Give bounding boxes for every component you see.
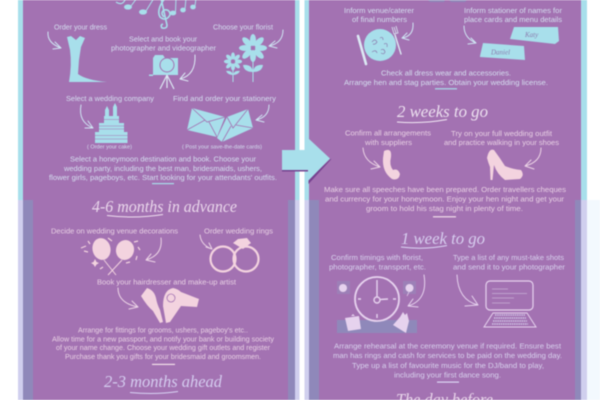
arrow: to balloons — [146, 238, 161, 262]
text: select and book your photographer and videographer: Select and book your — [129, 34, 197, 44]
icon: laptop with shot list — [484, 281, 536, 327]
text: fittings and passport paragraph — [52, 326, 274, 361]
heading: 1 week to go: 1 week to go — [401, 229, 485, 248]
arrow: to dress — [48, 32, 61, 49]
text: decide on wedding venue decorations: Decide on wedding venue decorations — [51, 226, 178, 236]
panel: right timeline column — [304, 0, 587, 400]
text: speeches paragraph — [324, 185, 566, 213]
icon: clock with flowers and gifts — [337, 277, 417, 333]
heading: 4-6 months in advance: 4-6 months in advance — [92, 197, 237, 216]
text: rehearsal paragraph — [333, 342, 562, 380]
arrow: big arrow between columns — [282, 138, 331, 184]
icon: plate with knife and fork — [358, 26, 401, 64]
icon: flowers — [224, 34, 267, 82]
text: rehearsal paragraph: Arrange rehearsal at the ceremony venue if required. Ensure best — [334, 342, 562, 350]
text: inform venue caterer — [344, 6, 414, 24]
icon: wedding rings — [210, 238, 258, 272]
icon: camera on tripod — [149, 55, 178, 89]
text: inform stationer — [464, 6, 562, 24]
text: rehearsal paragraph: man has rings and cash for services to be paid on the wedding day. — [333, 351, 562, 360]
text: honeymoon and party paragraph: Select a honeymoon destination and book. Choose your — [70, 154, 256, 164]
text: fittings and passport paragraph: Purchase thank you gifts for your bridesmaid and groomsmen. — [65, 352, 261, 361]
text: check dress wear paragraph: Arrange hen and stag parties. Obtain your wedding license. — [344, 78, 548, 87]
text: order your dress: Order your dress — [54, 22, 107, 32]
text: type a list of shots — [453, 253, 565, 272]
text: inform venue caterer: of final numbers — [352, 15, 407, 24]
arrow: to place cards — [464, 26, 476, 44]
text: try on outfit — [444, 129, 559, 147]
text: rehearsal paragraph: Type up a list of favourite music for the DJ/band to play, — [352, 361, 544, 370]
icon: hairbrush and hairdryer — [141, 288, 199, 323]
text: fittings and passport paragraph: of your name change. Choose your wedding gift outlets and register — [56, 343, 270, 352]
icon: place card Daniel: Daniel — [490, 48, 510, 56]
text: type a list of shots: and send it to your photographer — [453, 262, 565, 272]
arrow: to clock — [408, 275, 425, 307]
text: choose your florist: Choose your florist — [213, 22, 274, 32]
text: check dress wear paragraph — [344, 68, 548, 87]
text: speeches paragraph: groom to hold his stag night in plenty of time. — [366, 204, 523, 213]
text: confirm all arrangements — [345, 128, 431, 147]
arrow: to camera — [180, 55, 195, 81]
icon: place card Katy: Katy — [524, 31, 539, 39]
arrow: to brush and dryer — [118, 288, 138, 309]
text: select and book your photographer and videographer — [111, 34, 216, 52]
text: find and order your stationery: Find and order your stationery — [173, 94, 276, 103]
text: try on outfit: and practice walking in your shoes — [444, 138, 559, 147]
icon: balloons — [81, 236, 140, 275]
icon: wedding cake — [95, 103, 128, 143]
icon: high heel shoe — [487, 150, 523, 180]
arrow: to shoe — [525, 148, 541, 169]
icon: place card Katy — [510, 27, 559, 44]
text: try on outfit: Try on your full wedding outfit — [451, 129, 553, 138]
text: confirm timings: Confirm timings with florist, — [331, 253, 423, 262]
text: speeches paragraph: and currency for your honeymoon. Enjoy your hen night and get your — [325, 194, 564, 204]
text: honeymoon and party paragraph: flower girls, pageboys, etc. Start looking for your attendants' outfits. — [49, 173, 277, 182]
text: order your cake: ( Order your cake) — [87, 144, 132, 150]
text: confirm all arrangements: with suppliers — [364, 138, 412, 147]
text: inform stationer: place cards and menu details — [464, 15, 562, 24]
text: select a wedding company: Select a wedding company — [66, 94, 154, 103]
text: book your hairdresser and make-up artist: Book your hairdresser and make-up artist — [97, 278, 237, 286]
icon: partial periwinkle shapes at top of right column — [428, 0, 467, 2]
heading: 2 weeks to go: 2 weeks to go — [397, 102, 488, 121]
icon: telephone handset — [383, 150, 400, 179]
text: inform stationer: Inform stationer of names for — [464, 6, 562, 15]
text: confirm timings: photographer, transport, etc. — [329, 262, 426, 272]
text: fittings and passport paragraph: Arrange for fittings for grooms, ushers, pageboy's etc.. — [78, 326, 248, 334]
text: select and book your photographer and videographer: photographer and videographer — [111, 44, 216, 52]
arrow: to rings — [200, 235, 212, 249]
text: check dress wear paragraph: Check all dress wear and accessories. — [381, 68, 511, 78]
arrow: to plate — [402, 23, 413, 40]
text: confirm timings — [329, 253, 426, 272]
arrow: to flowers — [269, 30, 283, 48]
icon: envelopes — [187, 108, 253, 142]
heading: 2-3 months ahead: 2-3 months ahead — [104, 372, 222, 391]
arrow: to phone — [363, 148, 380, 169]
text: honeymoon and party paragraph: wedding party, including the best man, bridesmaids, ushers, — [63, 164, 262, 173]
text: honeymoon and party paragraph — [49, 154, 277, 182]
text: speeches paragraph: Make sure all speeches have been prepared. Order travellers cheques — [324, 185, 566, 194]
icon: music notes and treble clef — [116, 0, 196, 28]
arrow: to laptop — [457, 275, 478, 306]
text: type a list of shots: Type a list of any must-take shots — [453, 253, 564, 262]
icon: place card Daniel — [480, 43, 525, 60]
text: rehearsal paragraph: including your first dance song. — [394, 370, 501, 380]
panel: left timeline column — [18, 0, 300, 400]
arrow: to cake — [80, 105, 93, 128]
text: fittings and passport paragraph: Allow time for a new passport, and notify your bank or building society — [52, 334, 274, 344]
text: order wedding rings: Order wedding rings — [204, 226, 273, 236]
arrow: to envelopes — [256, 105, 269, 122]
text: post your save the date cards: ( Post your save-the-date cards) — [182, 144, 262, 150]
icon: wedding dress — [67, 36, 107, 82]
text: inform venue caterer: Inform venue/caterer — [344, 6, 414, 15]
text: confirm all arrangements: Confirm all arrangements — [345, 128, 431, 138]
